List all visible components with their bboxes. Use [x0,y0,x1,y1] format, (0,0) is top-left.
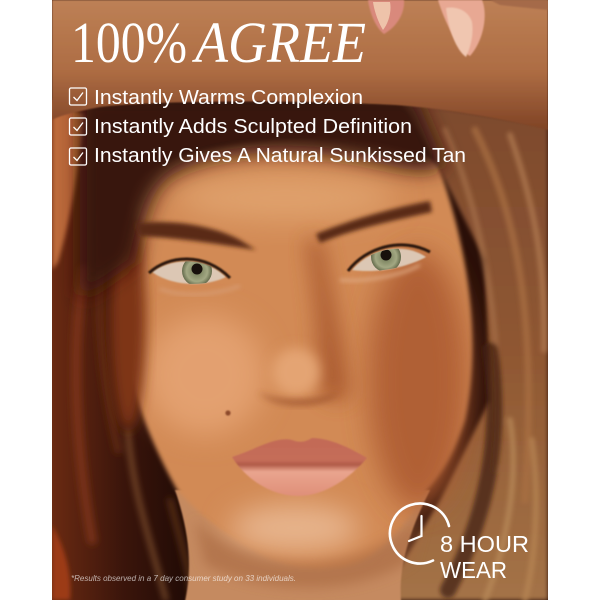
chin light [230,504,360,552]
cheek left edge shadow [110,210,146,430]
face [110,138,472,569]
cheek left glow [145,315,265,435]
eye left [149,256,240,294]
forehead shadow [80,95,445,300]
finger top right [490,0,548,10]
under chin shadow [195,510,425,588]
eye right [340,242,430,280]
neck [175,490,430,600]
nose tip [272,348,320,396]
arm top [52,0,548,130]
hair right [400,106,548,600]
eyebrow right [316,201,432,243]
item: warms complexion: Instantly Warms Complexion [94,87,363,109]
title: 100% [71,10,187,75]
item: sculpted definition: Instantly Adds Sculpted Definition [94,116,412,138]
lips [232,438,367,496]
badge: 8 hour wear: WEAR [440,557,507,583]
title [71,10,366,75]
nose shadow [306,240,350,401]
hair left [52,100,192,600]
title: AGREE [191,10,366,75]
arm left bottom edge [52,525,70,600]
checklist [70,87,466,167]
mole [225,410,231,416]
eyebrow left [135,222,256,250]
footnote: *Results observed in a 7 day consumer study on 33 individuals. [71,573,296,583]
finger nail left [368,0,404,34]
arm left lower [52,100,85,270]
forehead light [175,174,395,222]
finger nail right [438,0,485,57]
badge: 8 hour wear [390,503,529,583]
nostril shadow [258,392,340,406]
item: sunkissed tan: Instantly Gives A Natural Sunkissed Tan [94,145,466,167]
cheek right shadow [368,250,468,510]
icon: clock [390,503,449,563]
badge: 8 hour wear: 8 HOUR [440,531,529,557]
